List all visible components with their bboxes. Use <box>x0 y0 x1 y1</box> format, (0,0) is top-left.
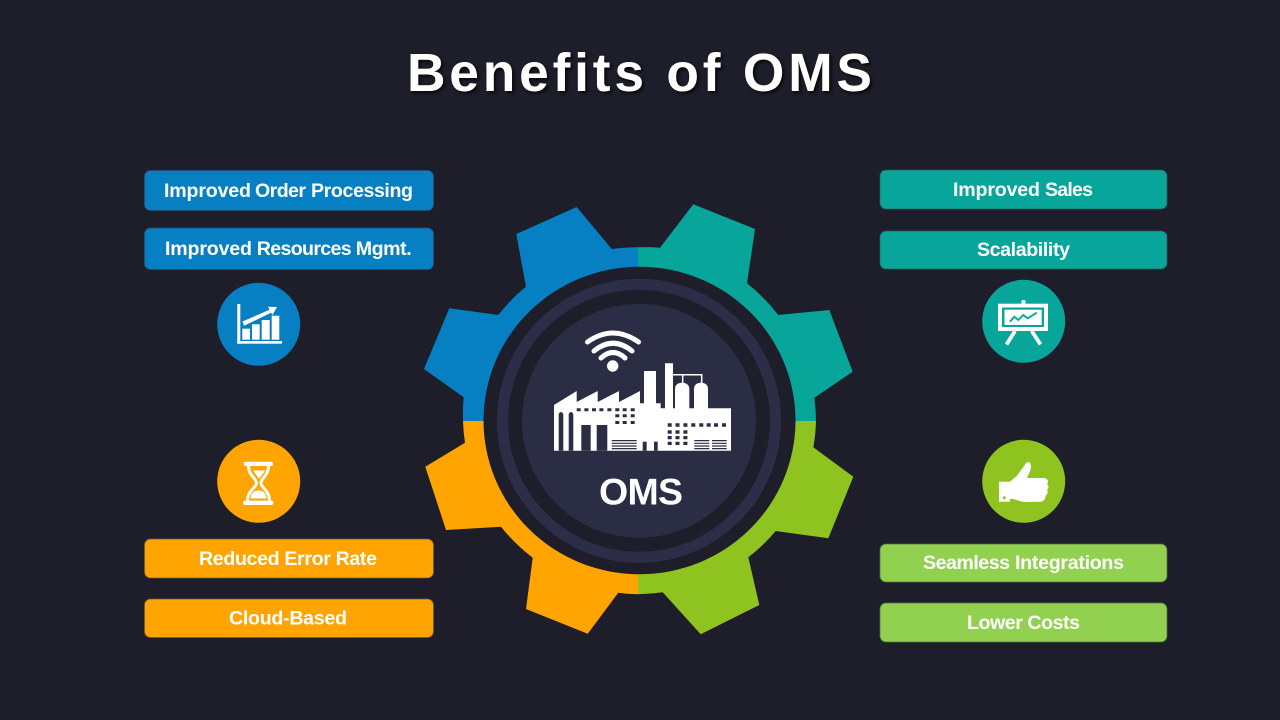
panel: seamless integrations: Integrations <box>1015 552 1124 574</box>
title: Benefits of OMS <box>407 44 872 103</box>
panel: improved sales: Sales <box>1045 179 1093 201</box>
panel: improved resources management <box>144 228 434 270</box>
panel: improved resources management: Mgmt. <box>356 238 412 260</box>
panel: improved order processing: Processing <box>311 180 413 202</box>
icon: thumbs up <box>982 440 1065 523</box>
icon: presentation easel <box>982 280 1065 363</box>
panel: improved resources management: Resources <box>257 238 352 260</box>
gear segment: teal <box>638 204 853 421</box>
icon: growth bar chart <box>217 283 300 366</box>
gear hole <box>484 267 796 574</box>
panel: seamless integrations <box>880 544 1167 582</box>
gear segment: green <box>638 421 853 634</box>
panel: seamless integrations: Seamless <box>923 552 1010 574</box>
centre disc <box>522 304 756 538</box>
icon: wifi signal <box>588 333 638 372</box>
panel: lower costs: Lower Costs <box>967 612 1080 634</box>
gear segment: orange <box>425 421 638 634</box>
central gear <box>424 204 853 634</box>
panel: improved sales <box>880 170 1167 209</box>
panel: reduced error rate: Reduced Error Rate <box>199 548 377 570</box>
centre label: OMS <box>599 470 683 512</box>
panel: improved order processing: Order <box>255 180 306 202</box>
panel: scalability: Scalability <box>977 239 1070 261</box>
panel: improved sales: Improved <box>953 179 1040 201</box>
panel: reduced error rate <box>144 539 434 578</box>
icon: factory <box>554 363 731 451</box>
panel: cloud-based <box>144 599 434 638</box>
panel: improved resources management: Improved <box>165 238 252 260</box>
panel: improved order processing: Improved <box>164 180 251 202</box>
outer ring <box>502 284 776 557</box>
panel: cloud-based: Cloud-Based <box>229 608 347 630</box>
panel: scalability <box>880 231 1167 269</box>
panel: improved order processing <box>144 170 434 210</box>
gear segment: blue <box>424 207 638 421</box>
panel: lower costs <box>880 603 1167 642</box>
icon: hourglass <box>217 440 300 523</box>
